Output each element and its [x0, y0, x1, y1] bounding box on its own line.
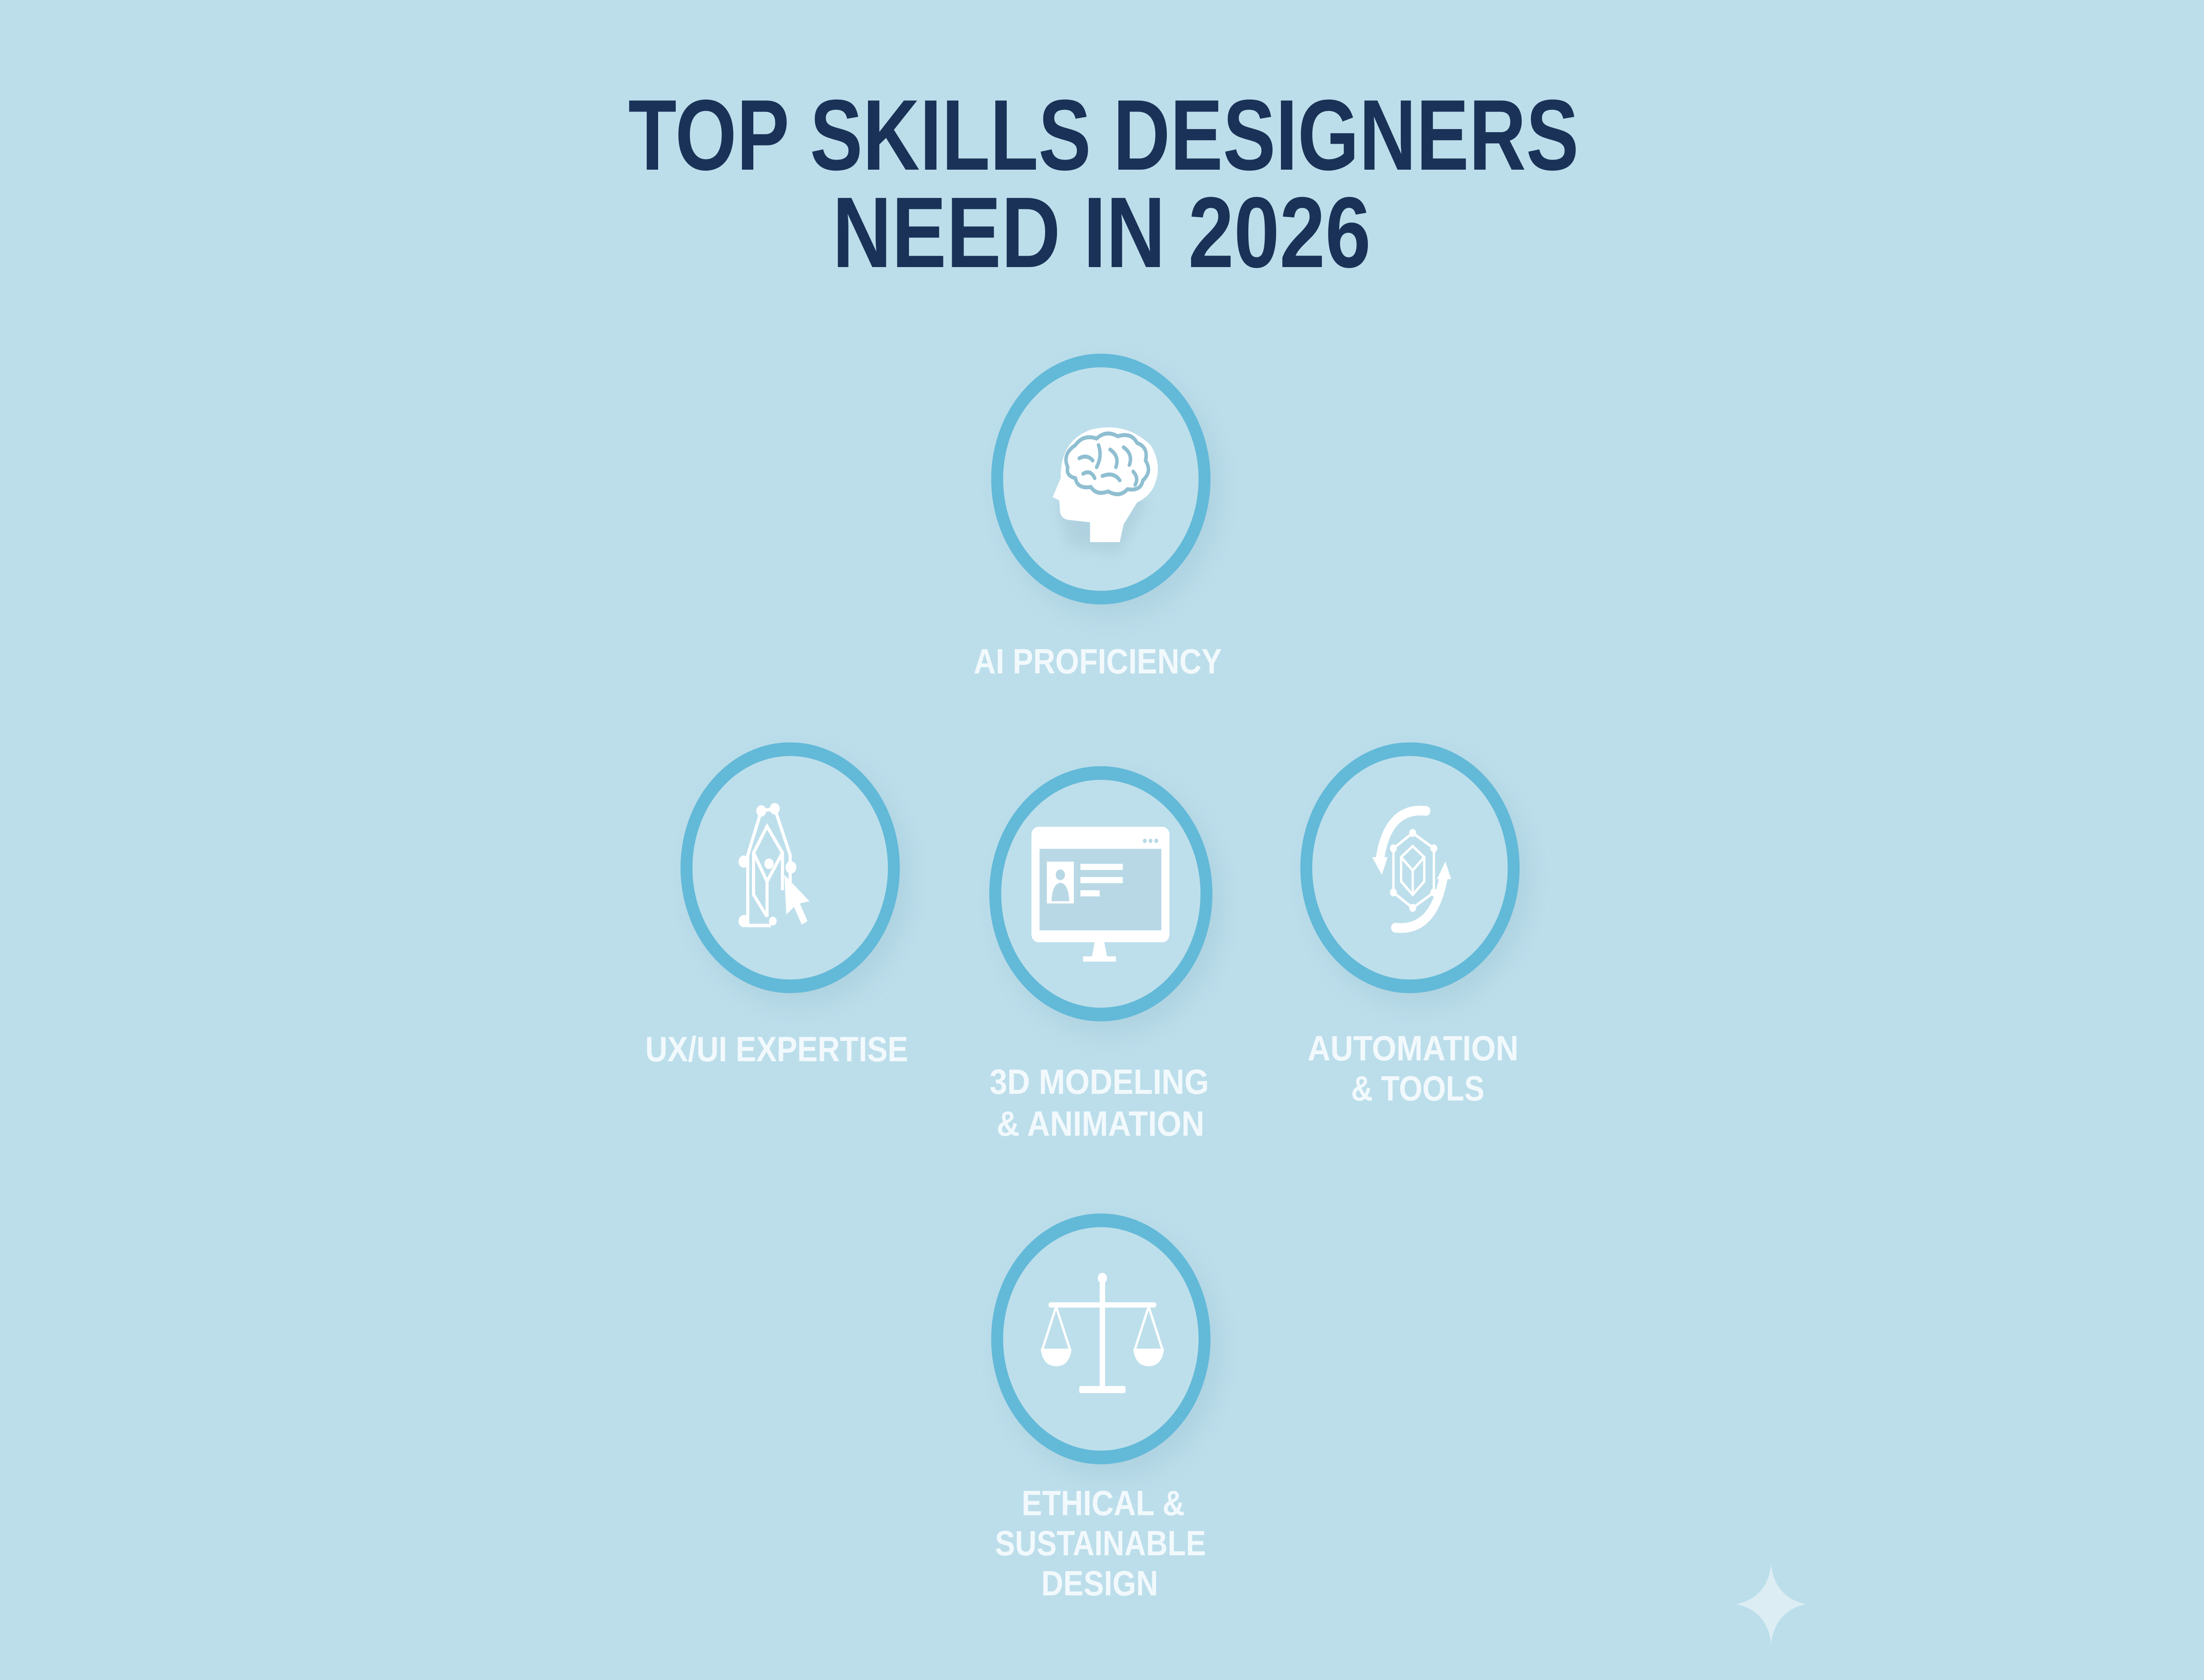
skill: 3D modeling & animation: & ANIMATION [997, 1104, 1204, 1143]
icon: cube with cursor [738, 803, 809, 927]
title: NEED IN 2026 [832, 177, 1371, 289]
icon: sparkle watermark [1736, 1565, 1806, 1644]
skill: UX/UI expertise [645, 749, 909, 1069]
label: 3D MODELING [990, 1062, 1209, 1101]
icon: rotating cube [1372, 810, 1451, 928]
skill: ethical & sustainable design: DESIGN [1041, 1564, 1158, 1603]
skill: 3D modeling & animation [990, 773, 1222, 1143]
icon: balance scales [1041, 1273, 1164, 1393]
skill: automation & tools: & TOOLS [1351, 1069, 1484, 1108]
title: TOP SKILLS DESIGNERS [628, 79, 1579, 191]
skill: ethical & sustainable design: SUSTAINABLE [995, 1524, 1206, 1563]
skill: automation & tools [1306, 749, 1529, 1108]
icon: monitor [1031, 827, 1169, 962]
label: AUTOMATION [1308, 1029, 1519, 1068]
skill: ethical & sustainable design [995, 1220, 1220, 1603]
icon: brain head [1053, 427, 1158, 555]
label: UX/UI EXPERTISE [645, 1030, 908, 1069]
title [628, 79, 1579, 289]
label: AI PROFICIENCY [974, 642, 1222, 681]
label: ETHICAL & [1022, 1483, 1185, 1523]
skill: AI proficiency [974, 361, 1222, 681]
